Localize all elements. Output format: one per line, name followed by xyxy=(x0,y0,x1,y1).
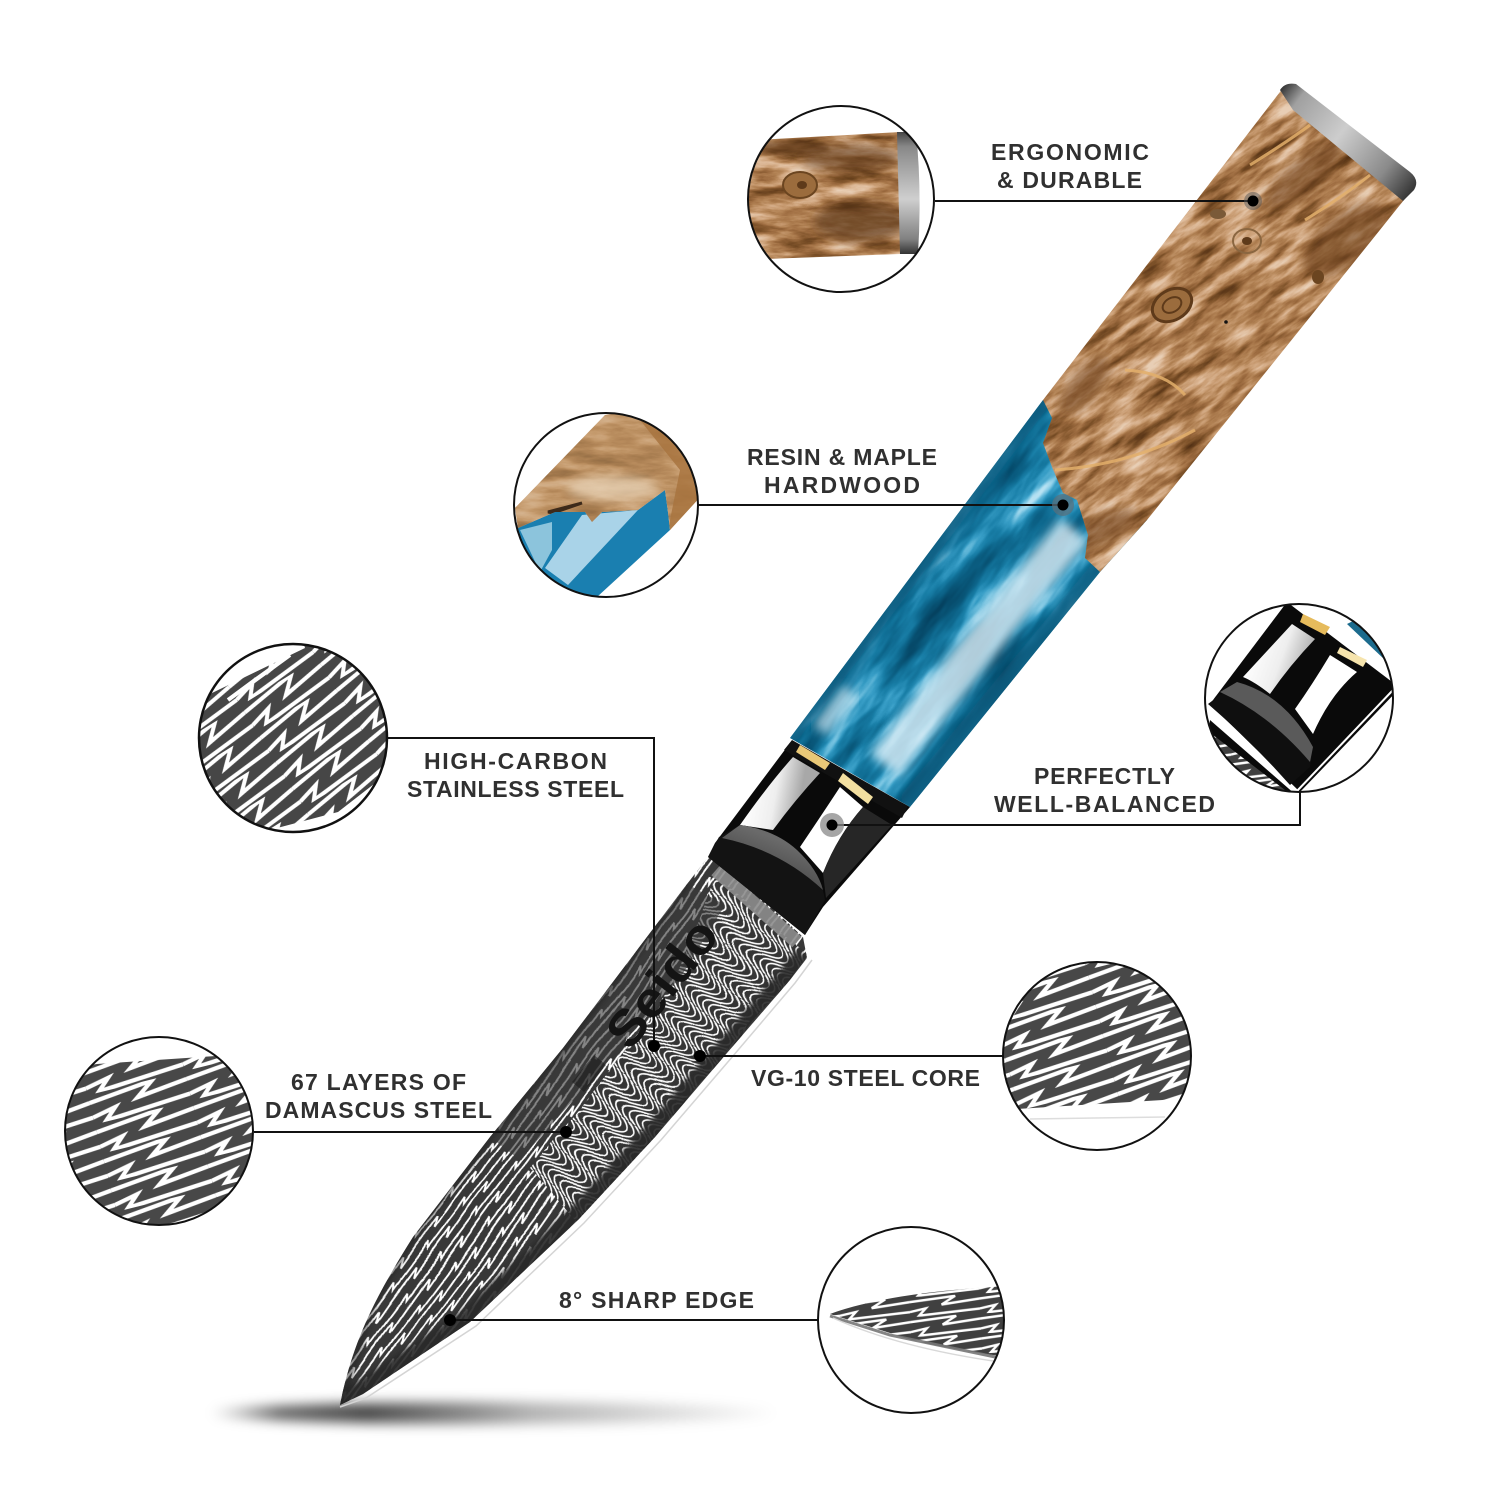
label: high-carbon stainless steel: STAINLESS STEEL xyxy=(407,776,624,802)
knife shadow xyxy=(205,1402,775,1424)
metal end cap xyxy=(1280,84,1416,201)
wood highlights xyxy=(1055,125,1370,470)
brand logo on blade: Seido xyxy=(595,908,730,1059)
callout markers xyxy=(444,192,1262,1326)
marker: core xyxy=(694,1050,706,1062)
callout circle: resin and maple detail xyxy=(513,412,699,598)
label: 67 layers of damascus steel: DAMASCUS STEEL xyxy=(265,1097,492,1123)
label: ergonomic and durable xyxy=(991,139,1149,193)
label: perfectly well-balanced: WELL-BALANCED xyxy=(994,791,1215,817)
callout circle: ergonomic wood detail xyxy=(747,105,935,293)
label: perfectly well-balanced: PERFECTLY xyxy=(1034,763,1175,789)
marker: layers xyxy=(560,1126,572,1138)
bolster xyxy=(708,740,910,935)
label: 67 layers of damascus steel: 67 LAYERS OF xyxy=(291,1069,466,1095)
resin handle section xyxy=(790,400,1148,807)
label: resin and maple hardwood xyxy=(747,444,937,498)
knife illustration xyxy=(300,0,1500,1440)
wood speck xyxy=(1224,320,1228,324)
marker: resin xyxy=(1052,494,1074,516)
leader lines xyxy=(254,201,1300,1320)
wood dark tones xyxy=(1051,131,1399,560)
label: ergonomic and durable: ERGONOMIC xyxy=(991,139,1149,165)
label: 8 degree sharp edge: 8° SHARP EDGE xyxy=(559,1287,754,1313)
callout circle: high-carbon steel detail xyxy=(198,642,388,834)
label: VG-10 steel core: VG-10 STEEL CORE xyxy=(751,1065,980,1091)
blade xyxy=(340,858,807,1405)
callout circle: sharp tip detail xyxy=(815,1222,1010,1417)
marker: ergonomic xyxy=(1244,192,1262,210)
callout circle: damascus layers detail xyxy=(64,1036,254,1226)
blade cutting edge highlight xyxy=(340,960,812,1407)
label: ergonomic and durable: & DURABLE xyxy=(997,167,1142,193)
label: resin and maple hardwood: HARDWOOD xyxy=(764,472,920,498)
logo mark on blade xyxy=(572,1055,606,1092)
label: resin and maple hardwood: RESIN & MAPLE xyxy=(747,444,937,470)
marker: balanced xyxy=(820,813,844,837)
wood knots xyxy=(1146,209,1324,328)
callout circle: steel core detail xyxy=(1002,961,1192,1151)
marker: edge xyxy=(444,1314,456,1326)
label: high-carbon stainless steel: HIGH-CARBON xyxy=(424,748,607,774)
label: high-carbon stainless steel xyxy=(407,748,624,802)
wood handle section xyxy=(1043,91,1405,572)
label: perfectly well-balanced xyxy=(994,763,1215,817)
label: 67 layers of damascus steel xyxy=(265,1069,492,1123)
marker: high-carbon xyxy=(648,1040,660,1052)
callout circle: bolster detail xyxy=(1200,600,1400,800)
